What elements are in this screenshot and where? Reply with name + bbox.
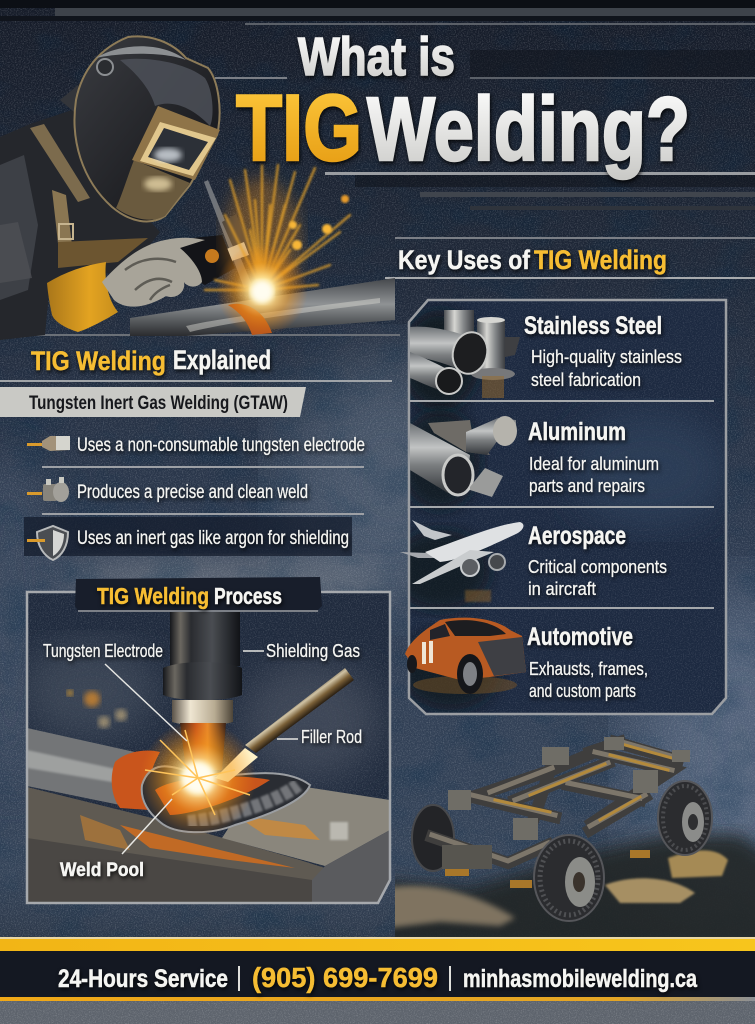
panel: key uses	[390, 300, 730, 714]
far tires	[412, 781, 712, 871]
item: Automotive: Automotive	[527, 623, 633, 651]
list item 3: Uses an inert gas like argon for shielding	[77, 528, 349, 549]
arc glow	[140, 720, 256, 836]
torch	[204, 180, 252, 288]
weld bead	[142, 766, 310, 832]
footer: service: 24-Hours Service	[58, 965, 228, 993]
label: Tungsten Electrode: Tungsten Electrode	[43, 641, 163, 661]
process title banner: Process	[214, 583, 282, 609]
heading: TIG Welding Explained: Explained	[173, 345, 271, 375]
icon: fittings	[27, 477, 69, 502]
list item 1: Uses a non-consumable tungsten electrode	[77, 435, 365, 456]
item: Stainless Steel: steel fabrication	[531, 370, 641, 390]
item: Aluminum: parts and repairs	[529, 476, 645, 496]
heading: TIG Welding Explained: TIG Welding	[31, 346, 166, 376]
item: Automotive: and custom parts	[529, 681, 636, 701]
footer	[0, 937, 755, 1024]
heading: Key Uses of TIG Welding	[398, 245, 667, 275]
near tire	[534, 835, 604, 921]
item: Aerospace: in aircraft	[528, 579, 596, 599]
frame rails	[432, 740, 678, 863]
heading: Key Uses of TIG Welding: TIG Welding	[534, 245, 667, 275]
item: Aluminum: Aluminum	[528, 418, 626, 446]
heading: Key Uses of TIG Welding: Key Uses of	[398, 245, 531, 275]
welder body	[0, 70, 160, 340]
item: Stainless Steel	[410, 310, 682, 398]
filler rod	[215, 668, 354, 782]
label: Shielding Gas	[243, 641, 360, 661]
heading: TIG Welding Explained	[31, 345, 271, 376]
panel: TIG Welding Explained	[0, 345, 392, 560]
footer: phone: (905) 699-7699	[252, 962, 438, 993]
pipe	[130, 278, 395, 336]
welding sparks	[205, 165, 350, 302]
icon: electrode	[27, 436, 70, 451]
panel: TIG Welding Process	[20, 577, 390, 905]
ground dirt	[380, 835, 755, 950]
illustration: vehicle chassis	[380, 737, 755, 950]
title line 1: What is	[298, 27, 455, 87]
item: Stainless Steel: High-quality stainless	[531, 347, 682, 367]
item: Automotive: Exhausts, frames,	[529, 659, 648, 679]
item: Aluminum	[410, 416, 659, 497]
label: Filler Rod: Filler Rod	[301, 727, 362, 747]
label: Shielding Gas: Shielding Gas	[266, 641, 360, 661]
list item 3	[27, 526, 349, 560]
process title banner: TIG Welding	[97, 583, 209, 609]
label: Weld Pool: Weld Pool	[60, 860, 144, 881]
icon: steel pipes	[410, 310, 520, 398]
title line 2: TIG: TIG	[236, 75, 362, 180]
subtitle banner: Tungsten Inert Gas Welding (GTAW)	[29, 393, 288, 414]
base pipe	[27, 728, 160, 810]
torch nozzle	[163, 612, 242, 770]
helmet visor	[132, 106, 220, 180]
yellow cuff	[47, 262, 118, 332]
item: Automotive	[405, 618, 648, 701]
icon: shield	[27, 526, 68, 560]
item: Aerospace: Aerospace	[528, 522, 626, 550]
welding helmet	[74, 36, 220, 222]
title	[236, 27, 690, 180]
list item 2	[27, 477, 308, 503]
illustration: welder at work	[0, 36, 395, 340]
footer: website: minhasmobilewelding.ca	[463, 965, 698, 993]
list item 1	[27, 435, 365, 456]
weld bead	[228, 304, 272, 335]
icon: aluminum profiles	[410, 416, 517, 497]
orange sparkle dots	[67, 690, 127, 728]
icon: airplane	[400, 520, 523, 602]
label: Weld Pool	[60, 799, 172, 881]
glove	[102, 238, 205, 307]
label: Filler Rod	[277, 727, 362, 747]
process title banner	[75, 577, 322, 612]
item: Aluminum: Ideal for aluminum	[529, 454, 659, 474]
icon: orange car	[405, 618, 526, 694]
item: Aerospace: Critical components	[528, 557, 667, 577]
list item 2: Produces a precise and clean weld	[77, 482, 308, 503]
label: Tungsten Electrode	[43, 641, 187, 741]
item: Aerospace	[400, 520, 667, 602]
item: Stainless Steel: Stainless Steel	[524, 312, 662, 340]
steel plates	[27, 780, 390, 905]
frame blocks	[442, 737, 690, 869]
subtitle banner	[0, 387, 306, 417]
